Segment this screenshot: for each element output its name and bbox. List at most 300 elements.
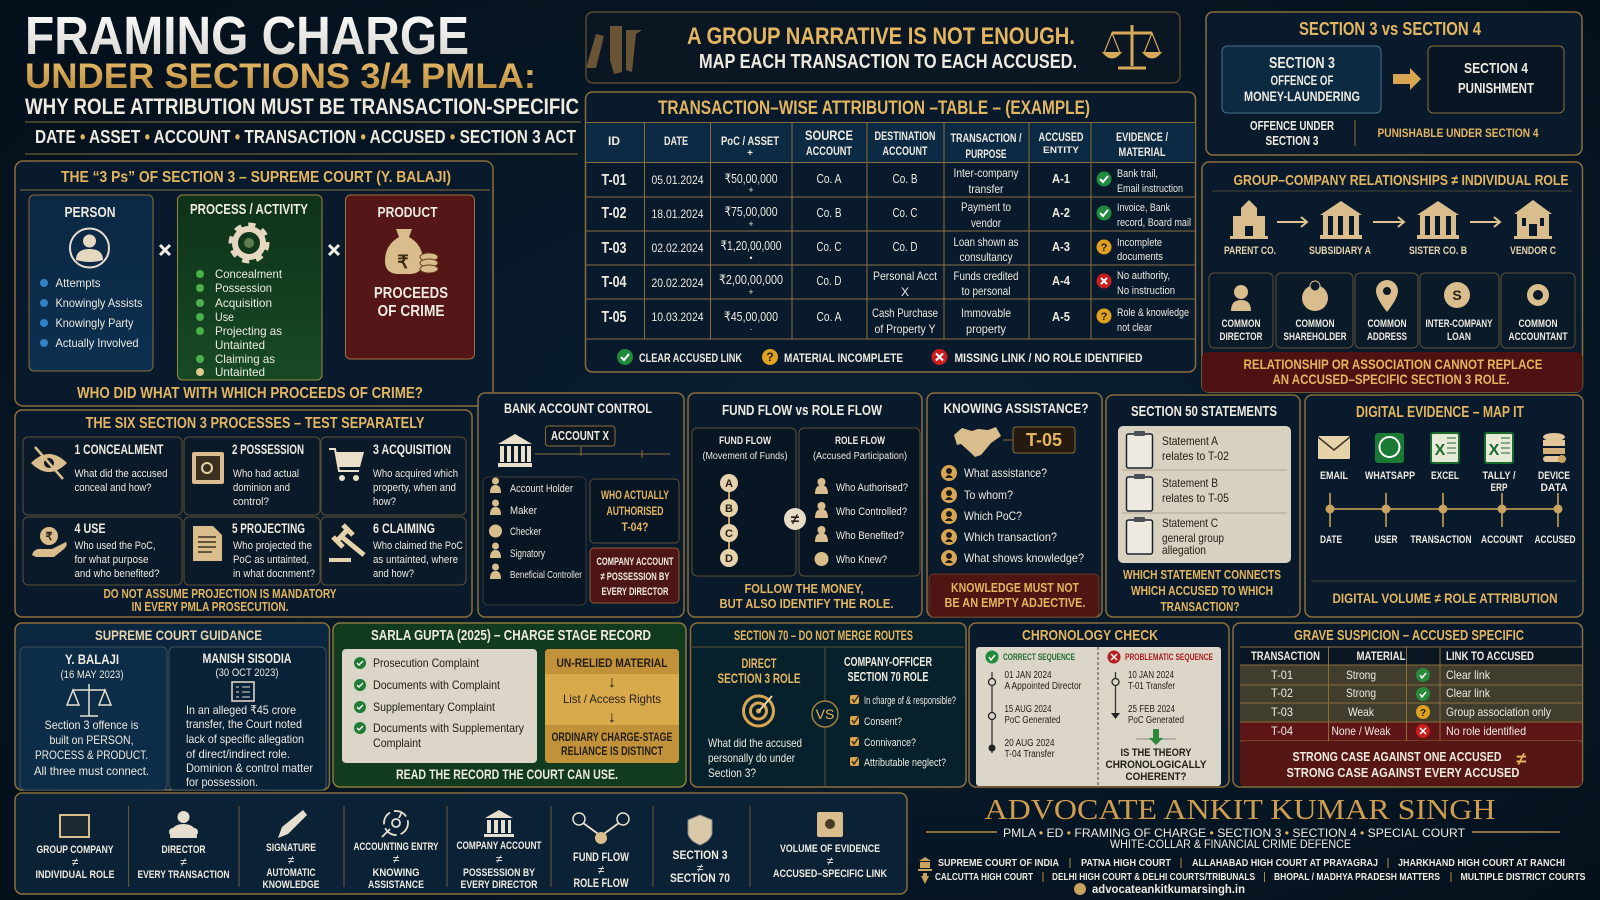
company officer route: Attributable neglect? xyxy=(864,757,946,769)
card: process / activity: Claiming as xyxy=(215,352,275,366)
footer: FOLLOW THE MONEY, xyxy=(744,581,864,596)
row T-02: 18.01.2024 xyxy=(652,207,704,221)
cell: possession: Who had actual xyxy=(233,468,299,480)
case: y. balaji xyxy=(20,647,167,790)
problematic sequence: PoC Generated xyxy=(1128,715,1184,726)
item: signature: SIGNATURE xyxy=(266,842,316,854)
arrow xyxy=(1393,68,1421,90)
statement card: relates to T-05 xyxy=(1162,491,1229,505)
table header row: SOURCE xyxy=(805,127,853,143)
problematic sequence: IS THE THEORY xyxy=(1120,747,1192,759)
row T-03: documents xyxy=(1117,251,1163,263)
row T-04: Personal Acct xyxy=(873,269,938,283)
heading: SECTION 50 STATEMENTS xyxy=(1131,403,1277,420)
row T-04: No authority, xyxy=(1117,270,1170,282)
row T-04: A-4 xyxy=(1052,273,1071,288)
cell: acquisition: Who acquired which xyxy=(373,468,458,480)
suspicion table: Clear link xyxy=(1446,668,1491,682)
heading: BANK ACCOUNT CONTROL xyxy=(504,400,652,416)
card: process / activity: Acquisition xyxy=(215,296,272,310)
card: product: OF CRIME xyxy=(378,303,445,320)
conclusion band: ≠ xyxy=(1517,749,1527,769)
item: company account: ≠ xyxy=(496,852,503,866)
correct sequence: PoC Generated xyxy=(1004,715,1060,726)
item: director: ≠ xyxy=(180,855,187,869)
box: section 4: PUNISHMENT xyxy=(1458,80,1534,97)
keyword row: DATE • ASSET • ACCOUNT • TRANSACTION • ACCUSED • SECTION 3 ACT xyxy=(35,127,576,147)
table header row: PURPOSE xyxy=(966,147,1006,161)
tile: common address xyxy=(1355,273,1418,348)
row T-03 xyxy=(602,235,1163,264)
item: company account xyxy=(456,810,542,891)
row T-05: · xyxy=(750,324,752,334)
card: person xyxy=(29,195,153,371)
row T-03: • xyxy=(749,253,753,263)
statement card: relates to T-02 xyxy=(1162,449,1229,463)
heading: DIGITAL EVIDENCE – MAP IT xyxy=(1356,404,1524,421)
table header row: ACCUSED xyxy=(1038,130,1084,144)
card: product: ₹ xyxy=(397,252,409,272)
title block xyxy=(25,6,581,154)
item: accounting entry: KNOWING xyxy=(372,867,420,879)
record checklist: Documents with Supplementary xyxy=(373,721,524,735)
row T-01 xyxy=(602,166,1183,196)
row T-01: Bank trail, xyxy=(1117,168,1158,180)
role list: Checker xyxy=(510,526,541,538)
row T-02: record, Board mail xyxy=(1117,217,1191,229)
advocate name: ADVOCATE ANKIT KUMAR SINGH xyxy=(984,794,1496,826)
suspicion table xyxy=(1240,647,1582,741)
item: company account: POSSESSION BY xyxy=(463,867,536,879)
panel: bank account control xyxy=(478,393,684,617)
cell: use: and who benefited? xyxy=(74,568,160,580)
fund flow column: A xyxy=(725,478,733,490)
entity chain: SISTER CO. B xyxy=(1409,245,1467,257)
item: fund flow xyxy=(573,813,630,890)
tile: common address: ADDRESS xyxy=(1367,331,1407,343)
table legend: CLEAR ACCUSED LINK xyxy=(639,351,742,365)
warning strip: AN ACCUSED–SPECIFIC SECTION 3 ROLE. xyxy=(1272,371,1510,387)
sub headline: MAP EACH TRANSACTION TO EACH ACCUSED. xyxy=(699,51,1077,73)
row T-05: 10.03.2024 xyxy=(652,310,704,324)
record checklist xyxy=(342,649,537,763)
caption: punishable: PUNISHABLE UNDER SECTION 4 xyxy=(1378,126,1539,140)
direct route: SECTION 3 ROLE xyxy=(718,670,800,686)
card: person: Actually Involved xyxy=(56,336,138,350)
correct sequence: 01 JAN 2024 xyxy=(1004,670,1052,681)
row T-01: transfer xyxy=(968,182,1004,196)
account x tag: ACCOUNT X xyxy=(551,428,609,443)
row T-05: ₹45,00,000 xyxy=(724,309,778,324)
correct sequence: T-04 Transfer xyxy=(1004,749,1055,760)
branding block xyxy=(918,794,1586,896)
item: volume of evidence xyxy=(773,812,887,880)
card: product: PRODUCT xyxy=(378,204,438,221)
footer question xyxy=(1123,567,1281,614)
row T-02: Co. C xyxy=(892,205,918,220)
panel: transaction table xyxy=(586,92,1196,372)
item: group company: ≠ xyxy=(72,855,79,869)
item: signature: KNOWLEDGE xyxy=(262,879,320,891)
row T-01: 05.01.2024 xyxy=(652,173,704,187)
cell: projecting: in what docnment? xyxy=(233,568,315,580)
tile: common address: COMMON xyxy=(1368,318,1407,330)
table header row: ACCOUNT xyxy=(806,144,853,158)
row T-04: X xyxy=(901,285,909,299)
icon: bank xyxy=(498,434,532,467)
item: group company xyxy=(36,815,114,881)
role flow column: ROLE FLOW xyxy=(835,435,885,447)
row T-04: Co. D xyxy=(816,273,842,288)
card: process / activity: Use xyxy=(215,310,234,324)
role flow column: Who Benefited? xyxy=(836,530,904,542)
case: y. balaji: built on PERSON, xyxy=(50,733,134,747)
suspicion table: None / Weak xyxy=(1332,724,1391,738)
table header row: DATE xyxy=(664,134,688,148)
strapline: WHY ROLE ATTRIBUTION MUST BE TRANSACTION-SPECIFIC xyxy=(25,94,579,119)
courts row 1 xyxy=(918,857,1565,871)
correct sequence: CORRECT SEQUENCE xyxy=(1003,652,1075,662)
case: manish sisodia: transfer, the Court noted xyxy=(186,717,302,731)
tile: common accountant: ACCOUNTANT xyxy=(1508,331,1568,343)
direct route: Section 3? xyxy=(708,766,756,780)
cell: claiming xyxy=(321,517,466,585)
correct sequence: A Appointed Director xyxy=(1004,681,1082,692)
row T-04: T-04 xyxy=(602,274,627,291)
row T-04: to personal xyxy=(962,284,1010,298)
card: person: Knowingly Party xyxy=(56,316,134,330)
suspicion table: MATERIAL xyxy=(1356,649,1406,663)
entity chain xyxy=(1224,200,1556,257)
source labels: TALLY / xyxy=(1482,470,1516,482)
card: process / activity: PROCESS / ACTIVITY xyxy=(190,201,308,218)
item: fund flow: ROLE FLOW xyxy=(574,876,629,890)
company officer route: Consent? xyxy=(864,716,902,728)
box: section 3: SECTION 3 xyxy=(1269,55,1335,72)
row T-05: property xyxy=(966,322,1006,336)
heading: SUPREME COURT GUIDANCE xyxy=(95,627,262,643)
row T-02: A-2 xyxy=(1052,205,1070,220)
item: accounting entry: ASSISTANCE xyxy=(368,879,424,891)
role flow column: Who Authorised? xyxy=(836,482,908,494)
case: manish sisodia: MANISH SISODIA xyxy=(202,650,292,666)
row T-03: T-03 xyxy=(602,240,627,257)
source labels: WHATSAPP xyxy=(1365,470,1415,482)
row T-05: Role & knowledge xyxy=(1117,307,1189,319)
suspicion table: LINK TO ACCUSED xyxy=(1446,649,1534,663)
heading: GRAVE SUSPICION – ACCUSED SPECIFIC xyxy=(1294,627,1524,644)
row T-05: ? xyxy=(1101,311,1108,323)
role flow column: (Accused Participation) xyxy=(813,451,907,462)
un-relied material box: ↓ xyxy=(608,674,616,691)
row T-03: 02.02.2024 xyxy=(652,241,704,255)
specialism: WHITE-COLLAR & FINANCIAL CRIME DEFENCE xyxy=(1110,837,1351,851)
courts row 2: CALCUTTA HIGH COURT xyxy=(935,872,1033,883)
case: manish sisodia: Dominion & control matter xyxy=(186,761,313,775)
fund flow column: B xyxy=(725,503,733,515)
row T-01: ₹50,00,000 xyxy=(724,171,778,186)
icon: handshake xyxy=(954,427,1001,457)
box: section 3: OFFENCE OF xyxy=(1270,72,1334,88)
problematic sequence: 10 JAN 2024 xyxy=(1128,670,1174,681)
row T-01: Co. A xyxy=(816,171,842,186)
panel: section 3 vs section 4 xyxy=(1206,12,1582,155)
cell: acquisition: property, when and xyxy=(373,482,456,494)
gold subtitle: UNDER SECTIONS 3/4 PMLA: xyxy=(25,57,536,96)
conclusion band xyxy=(1240,741,1582,786)
row T-04: No instruction xyxy=(1117,285,1175,297)
warning box xyxy=(929,574,1099,617)
question list: Which transaction? xyxy=(964,530,1057,544)
source labels: ERP xyxy=(1490,482,1508,494)
cell: acquisition: how? xyxy=(373,496,396,508)
tile: inter-company loan xyxy=(1420,273,1499,348)
case: y. balaji: Y. BALAJI xyxy=(65,651,119,667)
multiply sign xyxy=(329,245,339,255)
source labels: EMAIL xyxy=(1320,470,1348,482)
table legend: MATERIAL INCOMPLETE xyxy=(784,351,903,365)
record checklist: Documents with Complaint xyxy=(373,678,501,692)
item: section 3 / 70: SECTION 70 xyxy=(670,871,730,885)
warning box xyxy=(590,548,679,603)
row T-04: 20.02.2024 xyxy=(652,276,704,290)
row T-01: T-01 xyxy=(602,172,627,189)
problematic sequence: T-01 Transfer xyxy=(1128,681,1176,692)
cell: claiming: Who claimed the PoC xyxy=(373,540,463,552)
question box: T-04? xyxy=(622,520,648,534)
problematic sequence: 25 FEB 2024 xyxy=(1128,704,1175,715)
tile: common director xyxy=(1209,273,1273,348)
cell: possession: control? xyxy=(233,496,269,508)
question list: To whom? xyxy=(964,488,1013,502)
suspicion table: T-04 xyxy=(1271,724,1293,738)
table header row: MATERIAL xyxy=(1118,145,1166,159)
cell: concealment: 1 CONCEALMENT xyxy=(74,441,164,457)
case: manish sisodia: In an alleged ₹45 crore xyxy=(186,703,296,717)
card: process / activity: Projecting as xyxy=(215,324,282,338)
cell: possession: 2 POSSESSION xyxy=(232,441,304,457)
heading: FUND FLOW vs ROLE FLOW xyxy=(722,402,883,419)
row T-03: A-3 xyxy=(1052,239,1070,254)
warning box: EVERY DIRECTOR xyxy=(602,586,669,598)
entity chain: PARENT CO. xyxy=(1224,245,1276,257)
case: manish sisodia: for possession. xyxy=(186,775,258,789)
table header row: + xyxy=(747,148,753,159)
item: volume of evidence: VOLUME OF EVIDENCE xyxy=(780,843,880,855)
row T-05: Immovable xyxy=(961,306,1011,320)
role list: Account Holder xyxy=(510,483,573,495)
item: accounting entry: ACCOUNTING ENTRY xyxy=(354,841,439,853)
table header row: ENTITY xyxy=(1043,145,1079,155)
suspicion table: Strong xyxy=(1346,686,1376,700)
item: section 3 / 70 xyxy=(670,815,730,885)
courts row 1: ALLAHABAD HIGH COURT AT PRAYAGRAJ xyxy=(1192,858,1378,869)
tile: inter-company loan: LOAN xyxy=(1447,331,1471,343)
tile: common accountant: COMMON xyxy=(1518,318,1558,330)
vs badge xyxy=(812,701,838,727)
footer: READ THE RECORD THE COURT CAN USE. xyxy=(396,766,618,782)
un-relied material box: ORDINARY CHARGE-STAGE xyxy=(552,730,672,744)
panel: chronology check xyxy=(969,623,1229,787)
row T-02: vendor xyxy=(971,216,1001,230)
panel: fund flow vs role flow xyxy=(688,393,922,617)
case: y. balaji: Section 3 offence is xyxy=(44,718,138,732)
box: section 4 xyxy=(1428,46,1564,113)
box: section 3 xyxy=(1222,46,1381,113)
statement card: Statement B xyxy=(1162,476,1218,490)
box: section 4: SECTION 4 xyxy=(1464,60,1529,77)
table header row: PoC / ASSET xyxy=(721,134,780,148)
main title: FRAMING CHARGE xyxy=(25,6,469,66)
item: director: EVERY TRANSACTION xyxy=(138,869,230,881)
tile: common accountant xyxy=(1501,273,1575,348)
source labels xyxy=(1320,470,1570,494)
cell: acquisition: 3 ACQUISITION xyxy=(373,441,451,457)
card: person: Attempts xyxy=(56,276,100,290)
cell: projecting: PoC as untainted, xyxy=(233,554,309,566)
panel: the 3 Ps of Section 3 xyxy=(15,161,493,406)
row T-02: Invoice, Bank xyxy=(1117,202,1170,214)
panel: sarla gupta xyxy=(333,623,686,787)
table header row: ID xyxy=(608,134,620,148)
heading: KNOWING ASSISTANCE? xyxy=(944,400,1088,416)
item: fund flow: ≠ xyxy=(598,863,605,877)
role list: Beneficial Controller xyxy=(510,570,583,581)
role list: Signatory xyxy=(510,548,545,560)
entity chain: VENDOR C xyxy=(1510,245,1556,257)
company officer route: COMPANY-OFFICER xyxy=(844,654,932,669)
tile: common shareholder: SHAREHOLDER xyxy=(1284,331,1347,343)
question box: AUTHORISED xyxy=(606,504,664,518)
table header row: ACCOUNT xyxy=(882,144,928,158)
row T-04: + xyxy=(748,287,754,297)
cell: projecting: 5 PROJECTING xyxy=(232,520,305,536)
fund flow column: C xyxy=(725,528,733,540)
card: process / activity: Possession xyxy=(215,281,272,295)
row T-02: T-02 xyxy=(602,205,627,222)
item: accounting entry xyxy=(354,811,439,891)
item: group company: GROUP COMPANY xyxy=(36,844,114,856)
footer question: WHICH STATEMENT CONNECTS xyxy=(1123,567,1281,582)
record checklist: Supplementary Complaint xyxy=(373,700,496,714)
record checklist: Complaint xyxy=(373,736,422,750)
row T-01: A-1 xyxy=(1052,171,1070,186)
icon: scales of justice xyxy=(1104,25,1160,68)
table header row: DESTINATION xyxy=(874,129,936,143)
icon: pillars xyxy=(586,26,642,74)
statement card: Statement C xyxy=(1162,516,1218,530)
tag T-05: T-05 xyxy=(1026,430,1062,450)
role flow column: Who Controlled? xyxy=(836,506,907,518)
headline: A GROUP NARRATIVE IS NOT ENOUGH. xyxy=(687,23,1075,50)
suspicion table: No role identified xyxy=(1446,724,1526,738)
banner: group narrative xyxy=(586,12,1180,83)
item: signature: AUTOMATIC xyxy=(266,867,316,879)
fund flow column: D xyxy=(725,553,733,565)
courts row 2: BHOPAL / MADHYA PRADESH MATTERS xyxy=(1274,872,1440,883)
courts row 1: PATNA HIGH COURT xyxy=(1081,858,1171,869)
direct route: What did the accused xyxy=(708,736,802,750)
case: y. balaji: (16 MAY 2023) xyxy=(60,669,124,681)
mapping timeline xyxy=(1320,493,1576,546)
cell: concealment xyxy=(23,437,182,515)
row T-03: Loan shown as xyxy=(954,235,1018,249)
row T-03: Co. C xyxy=(816,239,842,254)
tile: common shareholder xyxy=(1276,273,1353,348)
card: process / activity: Untainted xyxy=(215,365,265,379)
cell: projecting: Who projected the xyxy=(233,540,312,552)
row T-03: consultancy xyxy=(960,250,1012,264)
courts row 1: SUPREME COURT OF INDIA xyxy=(938,858,1059,869)
question list: What shows knowledge? xyxy=(964,551,1084,565)
item: company account: COMPANY ACCOUNT xyxy=(456,840,542,852)
item: signature: ≠ xyxy=(288,853,295,867)
card: person: PERSON xyxy=(64,204,116,221)
card: person: Knowingly Assists xyxy=(56,296,142,310)
statement card xyxy=(1118,426,1291,563)
cell: concealment: conceal and how? xyxy=(74,482,152,494)
fund flow column: FUND FLOW xyxy=(719,435,771,447)
row T-02: + xyxy=(748,219,754,229)
cell: claiming: 6 CLAIMING xyxy=(373,520,435,536)
un-relied material box xyxy=(545,649,679,763)
panel: supreme court guidance xyxy=(15,623,330,790)
item: signature xyxy=(262,810,320,891)
mapping timeline: TRANSACTION xyxy=(1410,534,1472,546)
tile: inter-company loan: S xyxy=(1452,287,1462,303)
row T-05: A-5 xyxy=(1052,309,1070,324)
item: company account: EVERY DIRECTOR xyxy=(460,879,538,891)
question list xyxy=(941,465,1084,566)
card: product: PROCEEDS xyxy=(374,285,448,302)
heading: THE “3 Ps” OF SECTION 3 – SUPREME COURT (Y. BALAJI) xyxy=(61,169,451,186)
row T-01: Co. B xyxy=(892,171,918,186)
cell: claiming: as untainted, where xyxy=(373,554,458,566)
table heading: TRANSACTION–WISE ATTRIBUTION –TABLE – (EXAMPLE) xyxy=(658,98,1090,119)
row T-03: Co. D xyxy=(892,239,918,254)
cell: possession: dominion and xyxy=(233,482,290,494)
mapping timeline: DATE xyxy=(1320,534,1342,546)
caption: offence: OFFENCE UNDER xyxy=(1250,118,1334,133)
table header row: TRANSACTION / xyxy=(950,131,1022,145)
row T-04: ₹2,00,00,000 xyxy=(719,272,783,287)
mapping timeline: ACCOUNT xyxy=(1481,534,1523,546)
conclusion band: STRONG CASE AGAINST EVERY ACCUSED xyxy=(1286,765,1520,780)
footer note: IN EVERY PMLA PROSECUTION. xyxy=(132,599,288,614)
caption: offence xyxy=(1250,118,1334,148)
un-relied material box: ↓ xyxy=(608,709,616,726)
row T-05 xyxy=(602,306,1189,336)
row T-03: ₹1,20,00,000 xyxy=(720,238,782,253)
suspicion table: Group association only xyxy=(1446,705,1551,719)
suspicion table: T-02 xyxy=(1271,686,1293,700)
not equal badge: ≠ xyxy=(791,511,800,528)
website: advocateankitkumarsingh.in xyxy=(1092,882,1245,896)
row T-04: Funds credited xyxy=(954,269,1018,283)
card: product xyxy=(346,195,474,359)
table header row: EVIDENCE / xyxy=(1116,130,1169,144)
question box xyxy=(590,479,679,543)
footer note: DO NOT ASSUME PROJECTION IS MANDATORY xyxy=(104,586,337,601)
table header row xyxy=(608,127,1169,161)
source labels: DEVICE xyxy=(1538,470,1570,482)
panel: not-equal strip xyxy=(15,793,907,894)
panel: grave suspicion xyxy=(1233,623,1582,787)
item: volume of evidence: ACCUSED–SPECIFIC LINK xyxy=(773,868,887,880)
tile: common director: COMMON xyxy=(1222,318,1261,330)
table legend xyxy=(617,349,1143,365)
cell: concealment: What did the accused xyxy=(74,468,168,480)
